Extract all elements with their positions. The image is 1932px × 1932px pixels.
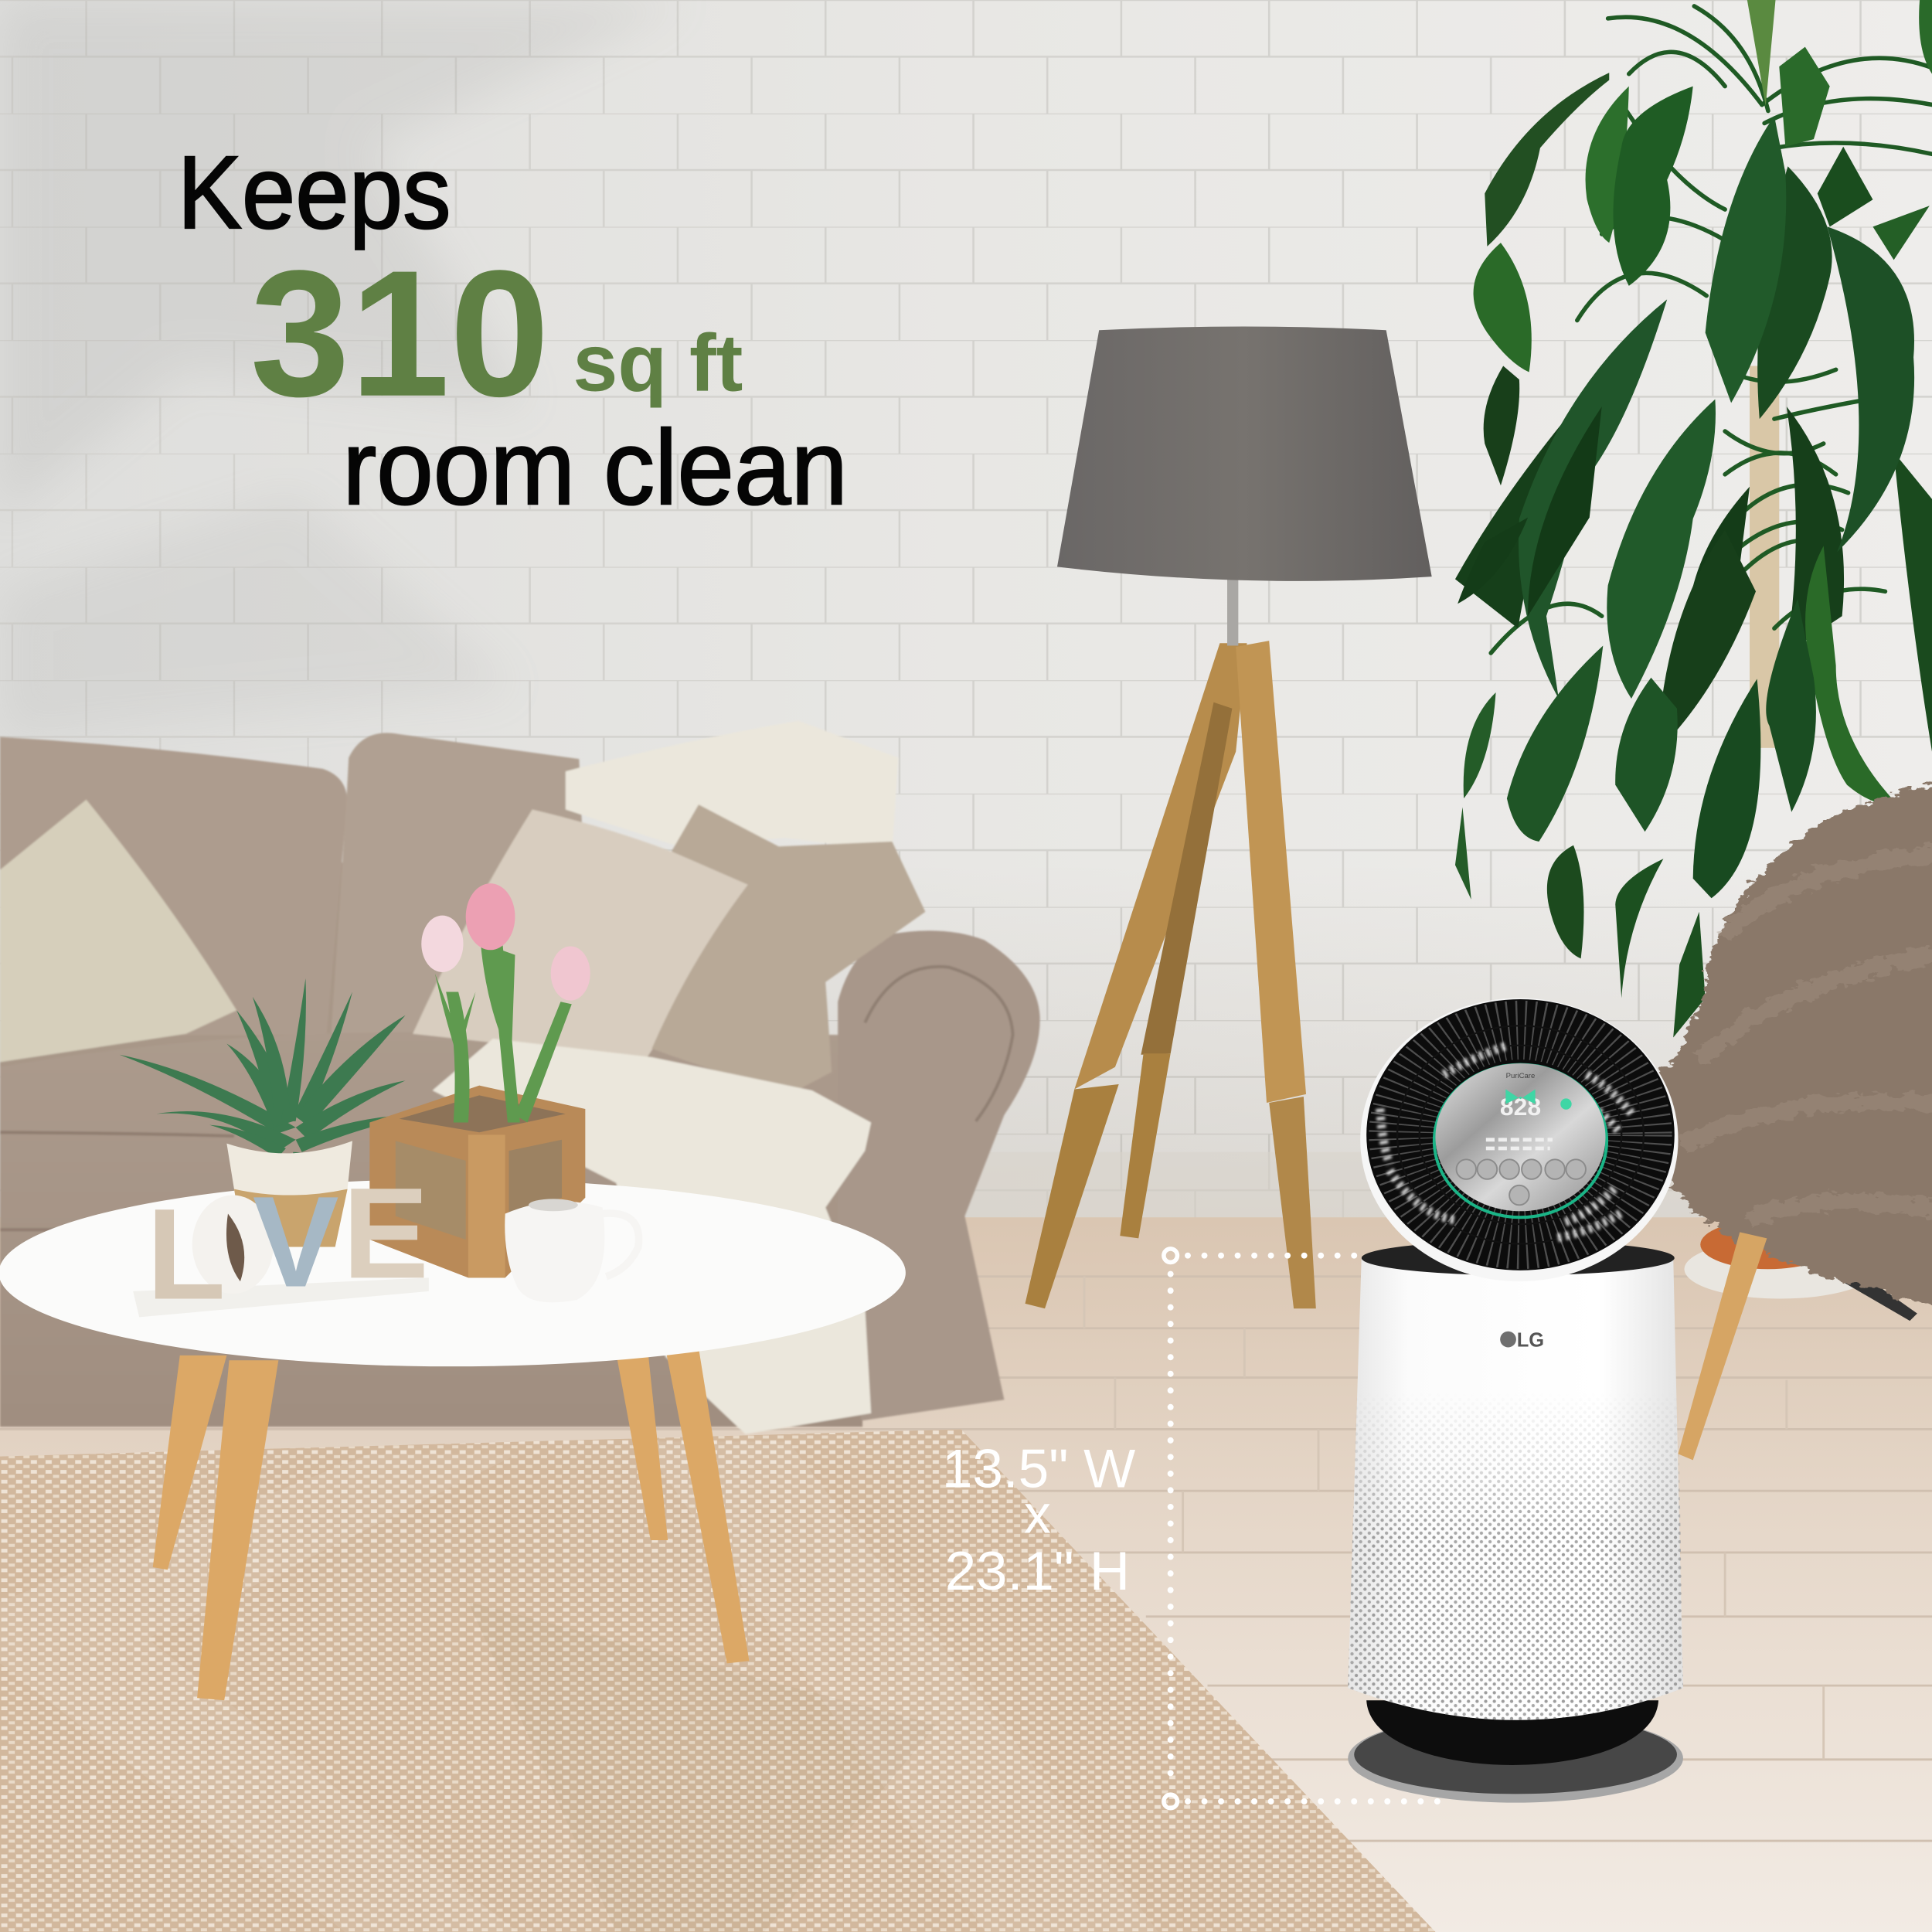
aloe pot <box>226 1141 352 1247</box>
silver control panel <box>1435 1063 1605 1211</box>
lamp tripod <box>1026 641 1316 1308</box>
rug <box>0 1429 1435 1932</box>
headline: sq ft: sq ft <box>573 318 743 408</box>
fur throw <box>1652 776 1932 1325</box>
lamp neck <box>1227 577 1238 645</box>
headline <box>178 135 848 527</box>
sofa back right cushion <box>330 733 591 1047</box>
fur chair <box>1652 776 1932 1460</box>
sofa seat and skirt <box>0 1032 862 1427</box>
headline: room clean: room clean <box>342 409 848 527</box>
back leaves <box>1455 0 1932 1037</box>
green light ring <box>1434 1065 1607 1217</box>
dimension label: 13.5" W <box>942 1437 1135 1498</box>
dimension label: x <box>1024 1483 1051 1544</box>
dimension bracket: dotted lines <box>1164 1249 1441 1808</box>
owl mug <box>505 1199 639 1302</box>
table legs <box>153 1348 749 1700</box>
tulip stems <box>435 943 572 1122</box>
headline: 310: 310 <box>250 233 549 434</box>
aloe plant <box>120 978 427 1247</box>
dimension label: 23.1" H <box>945 1540 1130 1601</box>
front leaves <box>1455 73 1914 958</box>
headline: Keeps: Keeps <box>178 135 451 250</box>
LOVE letters decoration: LOVE <box>147 1161 429 1326</box>
air purifier <box>1348 998 1683 1803</box>
knit throw top <box>566 721 898 852</box>
purifier rim opening <box>1362 1241 1675 1275</box>
house plant <box>1455 0 1932 1037</box>
coffee table <box>0 1179 906 1700</box>
thin arching leaves <box>1491 6 1932 653</box>
sofa <box>0 721 1040 1434</box>
display text: 828 <box>1500 1093 1541 1121</box>
background: white brick wall <box>0 0 1932 1232</box>
control buttons <box>1457 1159 1586 1205</box>
display text <box>1486 1072 1572 1148</box>
aloe leaves <box>120 978 427 1179</box>
display text: PuriCare <box>1506 1072 1535 1080</box>
wooden box <box>369 1086 585 1277</box>
purifier body <box>1348 1257 1683 1720</box>
head shell <box>1360 998 1679 1281</box>
tulip flowers <box>421 883 590 1001</box>
fan head <box>1360 998 1679 1281</box>
floor lamp <box>1026 327 1432 1308</box>
table top <box>0 1179 906 1366</box>
fan grille <box>1366 999 1675 1270</box>
tulips in wooden box <box>369 883 590 1277</box>
grille highlights <box>1380 1045 1633 1238</box>
plant trunk <box>1750 366 1779 748</box>
left pillow <box>0 800 236 1062</box>
wooden floor <box>0 1217 1932 1932</box>
center pillow <box>413 810 748 1060</box>
lamp shade <box>1057 327 1432 581</box>
purifier base <box>1348 1700 1683 1803</box>
dimension label <box>942 1437 1135 1601</box>
brown pillow <box>651 804 925 1093</box>
knit throw lower <box>433 1039 871 1434</box>
sofa back filler <box>0 862 591 1109</box>
chair base <box>1685 1219 1917 1321</box>
sofa right arm <box>838 930 1040 1420</box>
chair leg <box>1679 1232 1767 1460</box>
LG logo <box>1500 1330 1544 1352</box>
perforated mesh <box>1348 1393 1683 1720</box>
LG logo: LG <box>1517 1330 1544 1352</box>
sofa back left cushion <box>0 736 347 1035</box>
